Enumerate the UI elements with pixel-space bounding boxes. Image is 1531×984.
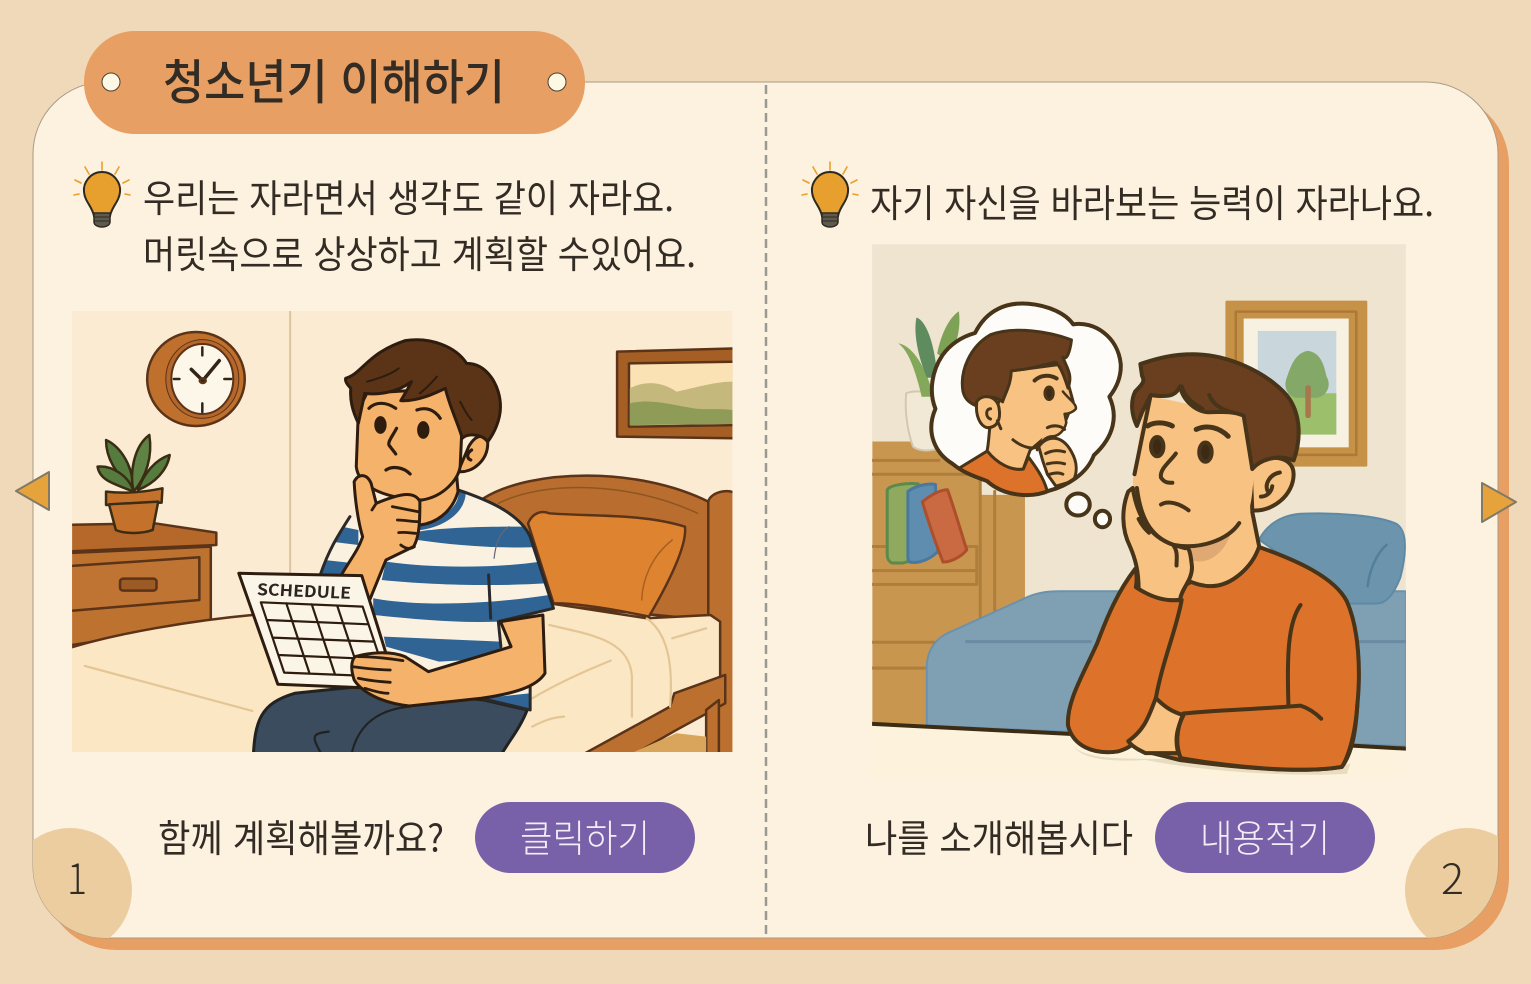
prompt: right: 나를 소개해봅시다 <box>865 808 1133 863</box>
schedule sheet: SCHEDULE <box>256 578 352 604</box>
schedule sheet <box>239 573 386 688</box>
nightstand <box>62 523 216 647</box>
arrow: next <box>1482 483 1516 522</box>
arrow: previous <box>16 472 49 510</box>
illustration: self reflection <box>872 244 1406 778</box>
button: write: 내용적기 <box>1200 808 1330 863</box>
page number 2: 2 <box>1441 846 1464 907</box>
icon: light bulb right <box>802 162 858 227</box>
title badge <box>84 31 585 134</box>
potted plant <box>98 435 170 533</box>
button: click: 클릭하기 <box>520 808 650 863</box>
wall picture <box>1225 301 1367 467</box>
text block: left description <box>143 168 696 279</box>
text block: right description: 자기 자신을 바라보는 능력이 자라나요. <box>870 173 1434 228</box>
books <box>887 484 967 563</box>
illustration: boy with schedule <box>62 311 740 760</box>
holding arm and hand <box>352 615 545 706</box>
thought bubble <box>931 303 1121 527</box>
prompt: left: 함께 계획해볼까요? <box>158 808 444 863</box>
jeans <box>252 688 528 752</box>
blue bed <box>927 513 1406 746</box>
title badge: 청소년기 이해하기 <box>163 43 505 113</box>
table <box>872 724 1406 778</box>
page number 1 <box>33 828 132 938</box>
dresser and shelves <box>872 441 1025 726</box>
icon: light bulb left <box>74 162 130 227</box>
button: click <box>475 802 695 873</box>
page number 2 <box>1405 828 1498 938</box>
page number 1: 1 <box>67 846 87 907</box>
text block: left description: 우리는 자라면서 생각도 같이 자라요. <box>143 168 674 223</box>
pillow <box>528 512 685 617</box>
bed headboard <box>483 476 740 760</box>
head and neck <box>346 340 500 525</box>
wall clock <box>147 332 245 426</box>
small self portrait <box>958 330 1076 498</box>
bedding <box>62 603 725 760</box>
striped shirt <box>319 488 555 712</box>
plant and pot <box>898 311 959 450</box>
text block: left description: 머릿속으로 상상하고 계획할 수있어요. <box>143 224 696 279</box>
picture frame <box>617 348 740 438</box>
raised hand <box>341 476 420 602</box>
button: write <box>1155 802 1375 873</box>
boy in orange sweater <box>1068 354 1359 770</box>
